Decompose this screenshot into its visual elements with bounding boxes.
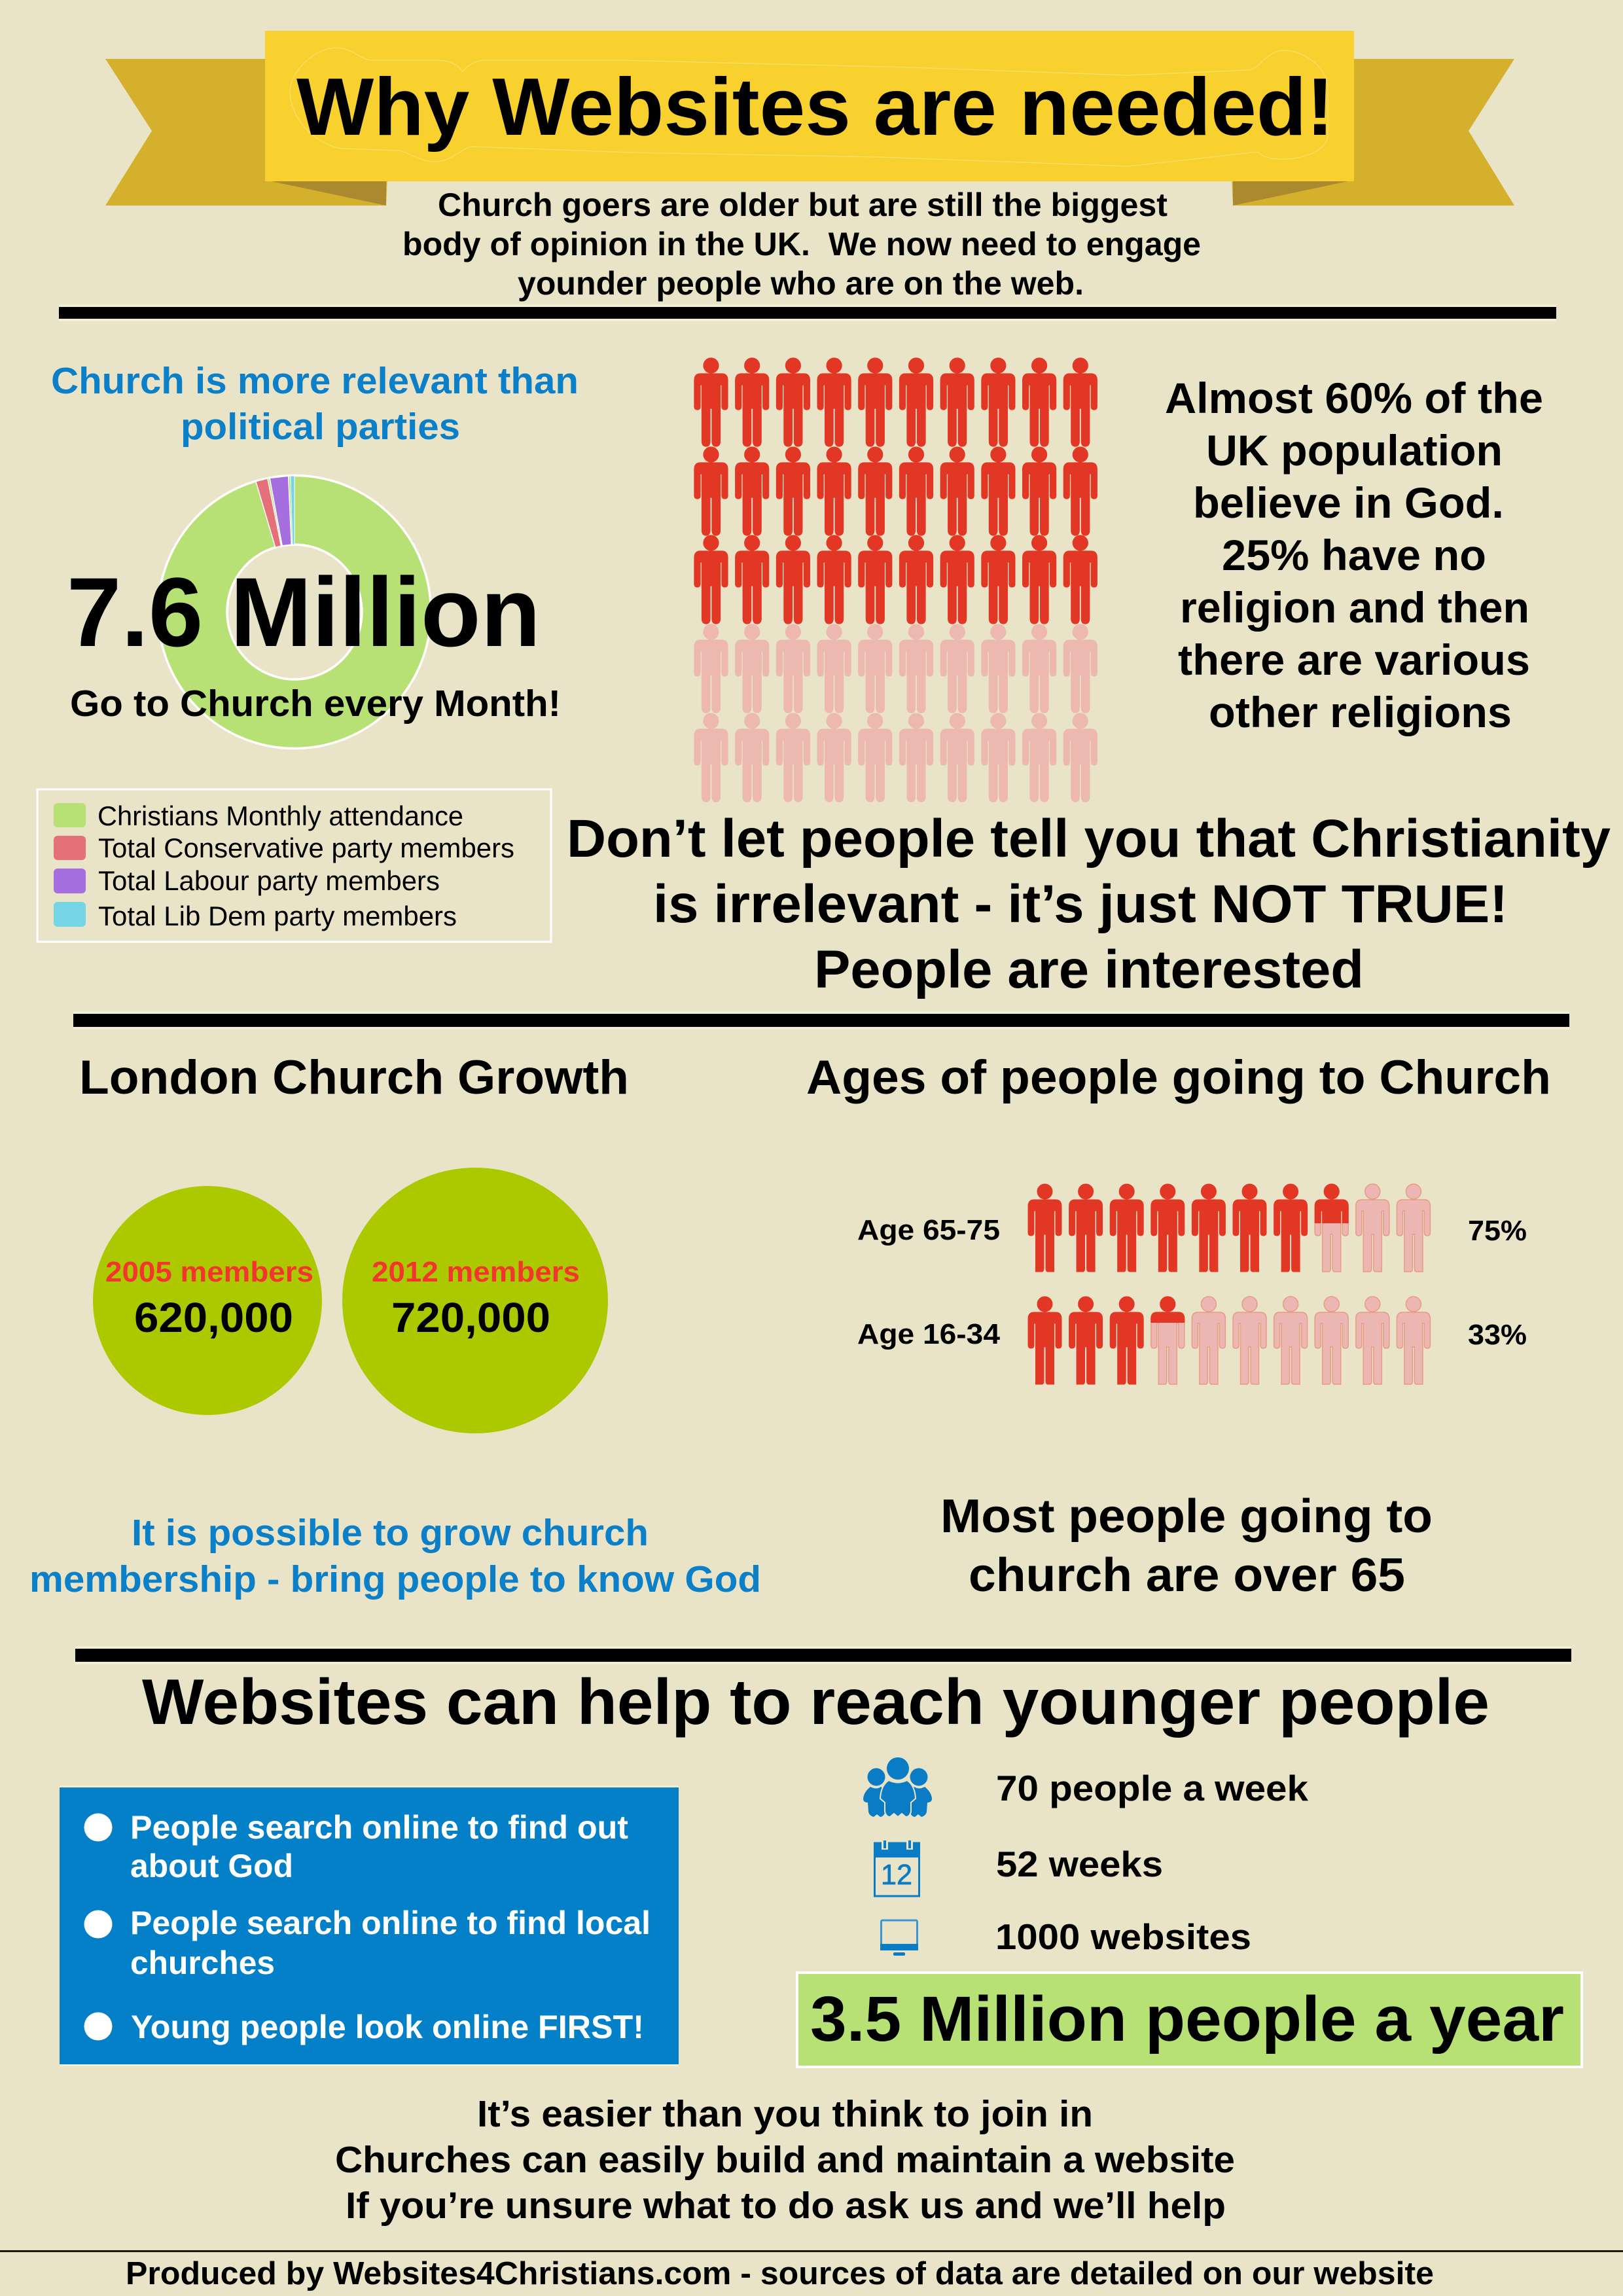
- heading: ages: Ages of people going to Church: [806, 1051, 1551, 1104]
- text: belief statistics: believe in God.: [1193, 478, 1504, 527]
- text: belief statistics: [1165, 374, 1543, 736]
- pictogram: belief in God: [694, 358, 1097, 802]
- row: age 16-34: [857, 1297, 1527, 1384]
- legend: Total Labour party members: [98, 865, 440, 896]
- row: age 65-75: [857, 1184, 1527, 1272]
- panel: reasons: People search online to find local: [130, 1905, 651, 1941]
- subtitle: [402, 187, 1201, 302]
- text: belief statistics: UK population: [1206, 426, 1503, 475]
- stat: websites: 1000 websites: [995, 1916, 1251, 1957]
- circle: 2012 members: 720,000: [391, 1294, 550, 1341]
- text: over 65: church are over 65: [969, 1549, 1405, 1602]
- circle: 2005 members: 620,000: [134, 1294, 293, 1341]
- text: closing message: Churches can easily build and maintain a website: [335, 2139, 1235, 2181]
- heading: websites help: Websites can help to reach younger people: [142, 1666, 1489, 1738]
- heading: church vs political parties: Church is more relevant than: [51, 360, 579, 402]
- donut chart: [158, 475, 431, 749]
- text: belief statistics: religion and then: [1180, 583, 1529, 632]
- row: age 65-75: 75%: [1468, 1215, 1527, 1247]
- statement: relevance: is irrelevant - it’s just NOT TRUE!: [653, 874, 1508, 934]
- statement: relevance: Don’t let people tell you that Christianity: [567, 809, 1611, 869]
- circle: 2012 members: [342, 1168, 608, 1433]
- legend: Total Lib Dem party members: [98, 901, 457, 931]
- big number: 7.6 Million: [67, 557, 541, 667]
- heading: London growth: London Church Growth: [79, 1051, 629, 1104]
- row: age 16-34: 33%: [1468, 1319, 1527, 1351]
- text: grow membership: [29, 1512, 761, 1600]
- subtitle: Church goers are older but are still the biggest: [438, 187, 1168, 223]
- text: closing message: [335, 2093, 1235, 2227]
- text: belief statistics: other religions: [1209, 688, 1512, 736]
- text: over 65: [940, 1490, 1433, 1602]
- legend: Total Conservative party members: [98, 833, 514, 863]
- icon: calendar: 12: [881, 1859, 912, 1891]
- icon: people: [863, 1757, 932, 1817]
- text: belief statistics: Almost 60% of the: [1165, 374, 1543, 422]
- panel: reasons: about God: [130, 1848, 293, 1884]
- text: belief statistics: 25% have no: [1222, 531, 1486, 579]
- subtitle: younder people who are on the web.: [518, 265, 1084, 302]
- text: closing message: If you’re unsure what to do ask us and we’ll help: [346, 2185, 1226, 2227]
- circle: 2012 members: 2012 members: [372, 1256, 580, 1288]
- text: closing message: It’s easier than you think to join in: [477, 2093, 1093, 2135]
- statement: relevance: People are interested: [814, 940, 1364, 999]
- subtitle: body of opinion in the UK. We now need to engage: [402, 226, 1201, 262]
- circle: 2005 members: 2005 members: [105, 1256, 313, 1288]
- row: age 16-34: Age 16-34: [857, 1318, 1001, 1350]
- callout: annual reach: 3.5 Million people a year: [810, 1983, 1564, 2054]
- panel: reasons: [60, 1785, 679, 2066]
- panel: reasons: Young people look online FIRST!: [131, 2009, 644, 2045]
- circle: 2005 members: [93, 1186, 322, 1415]
- heading: church vs political parties: political parties: [181, 406, 460, 448]
- title: Why Websites are needed!: [296, 62, 1334, 152]
- legend: Christians Monthly attendance: [98, 800, 463, 831]
- stat: weeks: 52 weeks: [996, 1844, 1163, 1884]
- text: grow membership: membership - bring people to know God: [29, 1558, 761, 1600]
- panel: reasons: churches: [130, 1945, 275, 1981]
- stat: people a week: 70 people a week: [996, 1768, 1308, 1808]
- icon: calendar: [874, 1839, 919, 1896]
- caption: Go to Church every Month!: [70, 683, 561, 725]
- text: over 65: Most people going to: [940, 1490, 1433, 1543]
- icon: monitor: [880, 1920, 918, 1956]
- text: belief statistics: there are various: [1178, 636, 1530, 684]
- legend: [37, 789, 551, 942]
- heading: church vs political parties: [51, 360, 579, 448]
- panel: reasons: People search online to find out: [130, 1809, 628, 1846]
- banner ribbon: [105, 31, 1514, 206]
- row: age 65-75: Age 65-75: [857, 1214, 1000, 1246]
- text: grow membership: It is possible to grow church: [132, 1512, 649, 1554]
- footer: Produced by Websites4Christians.com - sources of data are detailed on our website: [126, 2256, 1434, 2291]
- statement: relevance: [567, 809, 1611, 999]
